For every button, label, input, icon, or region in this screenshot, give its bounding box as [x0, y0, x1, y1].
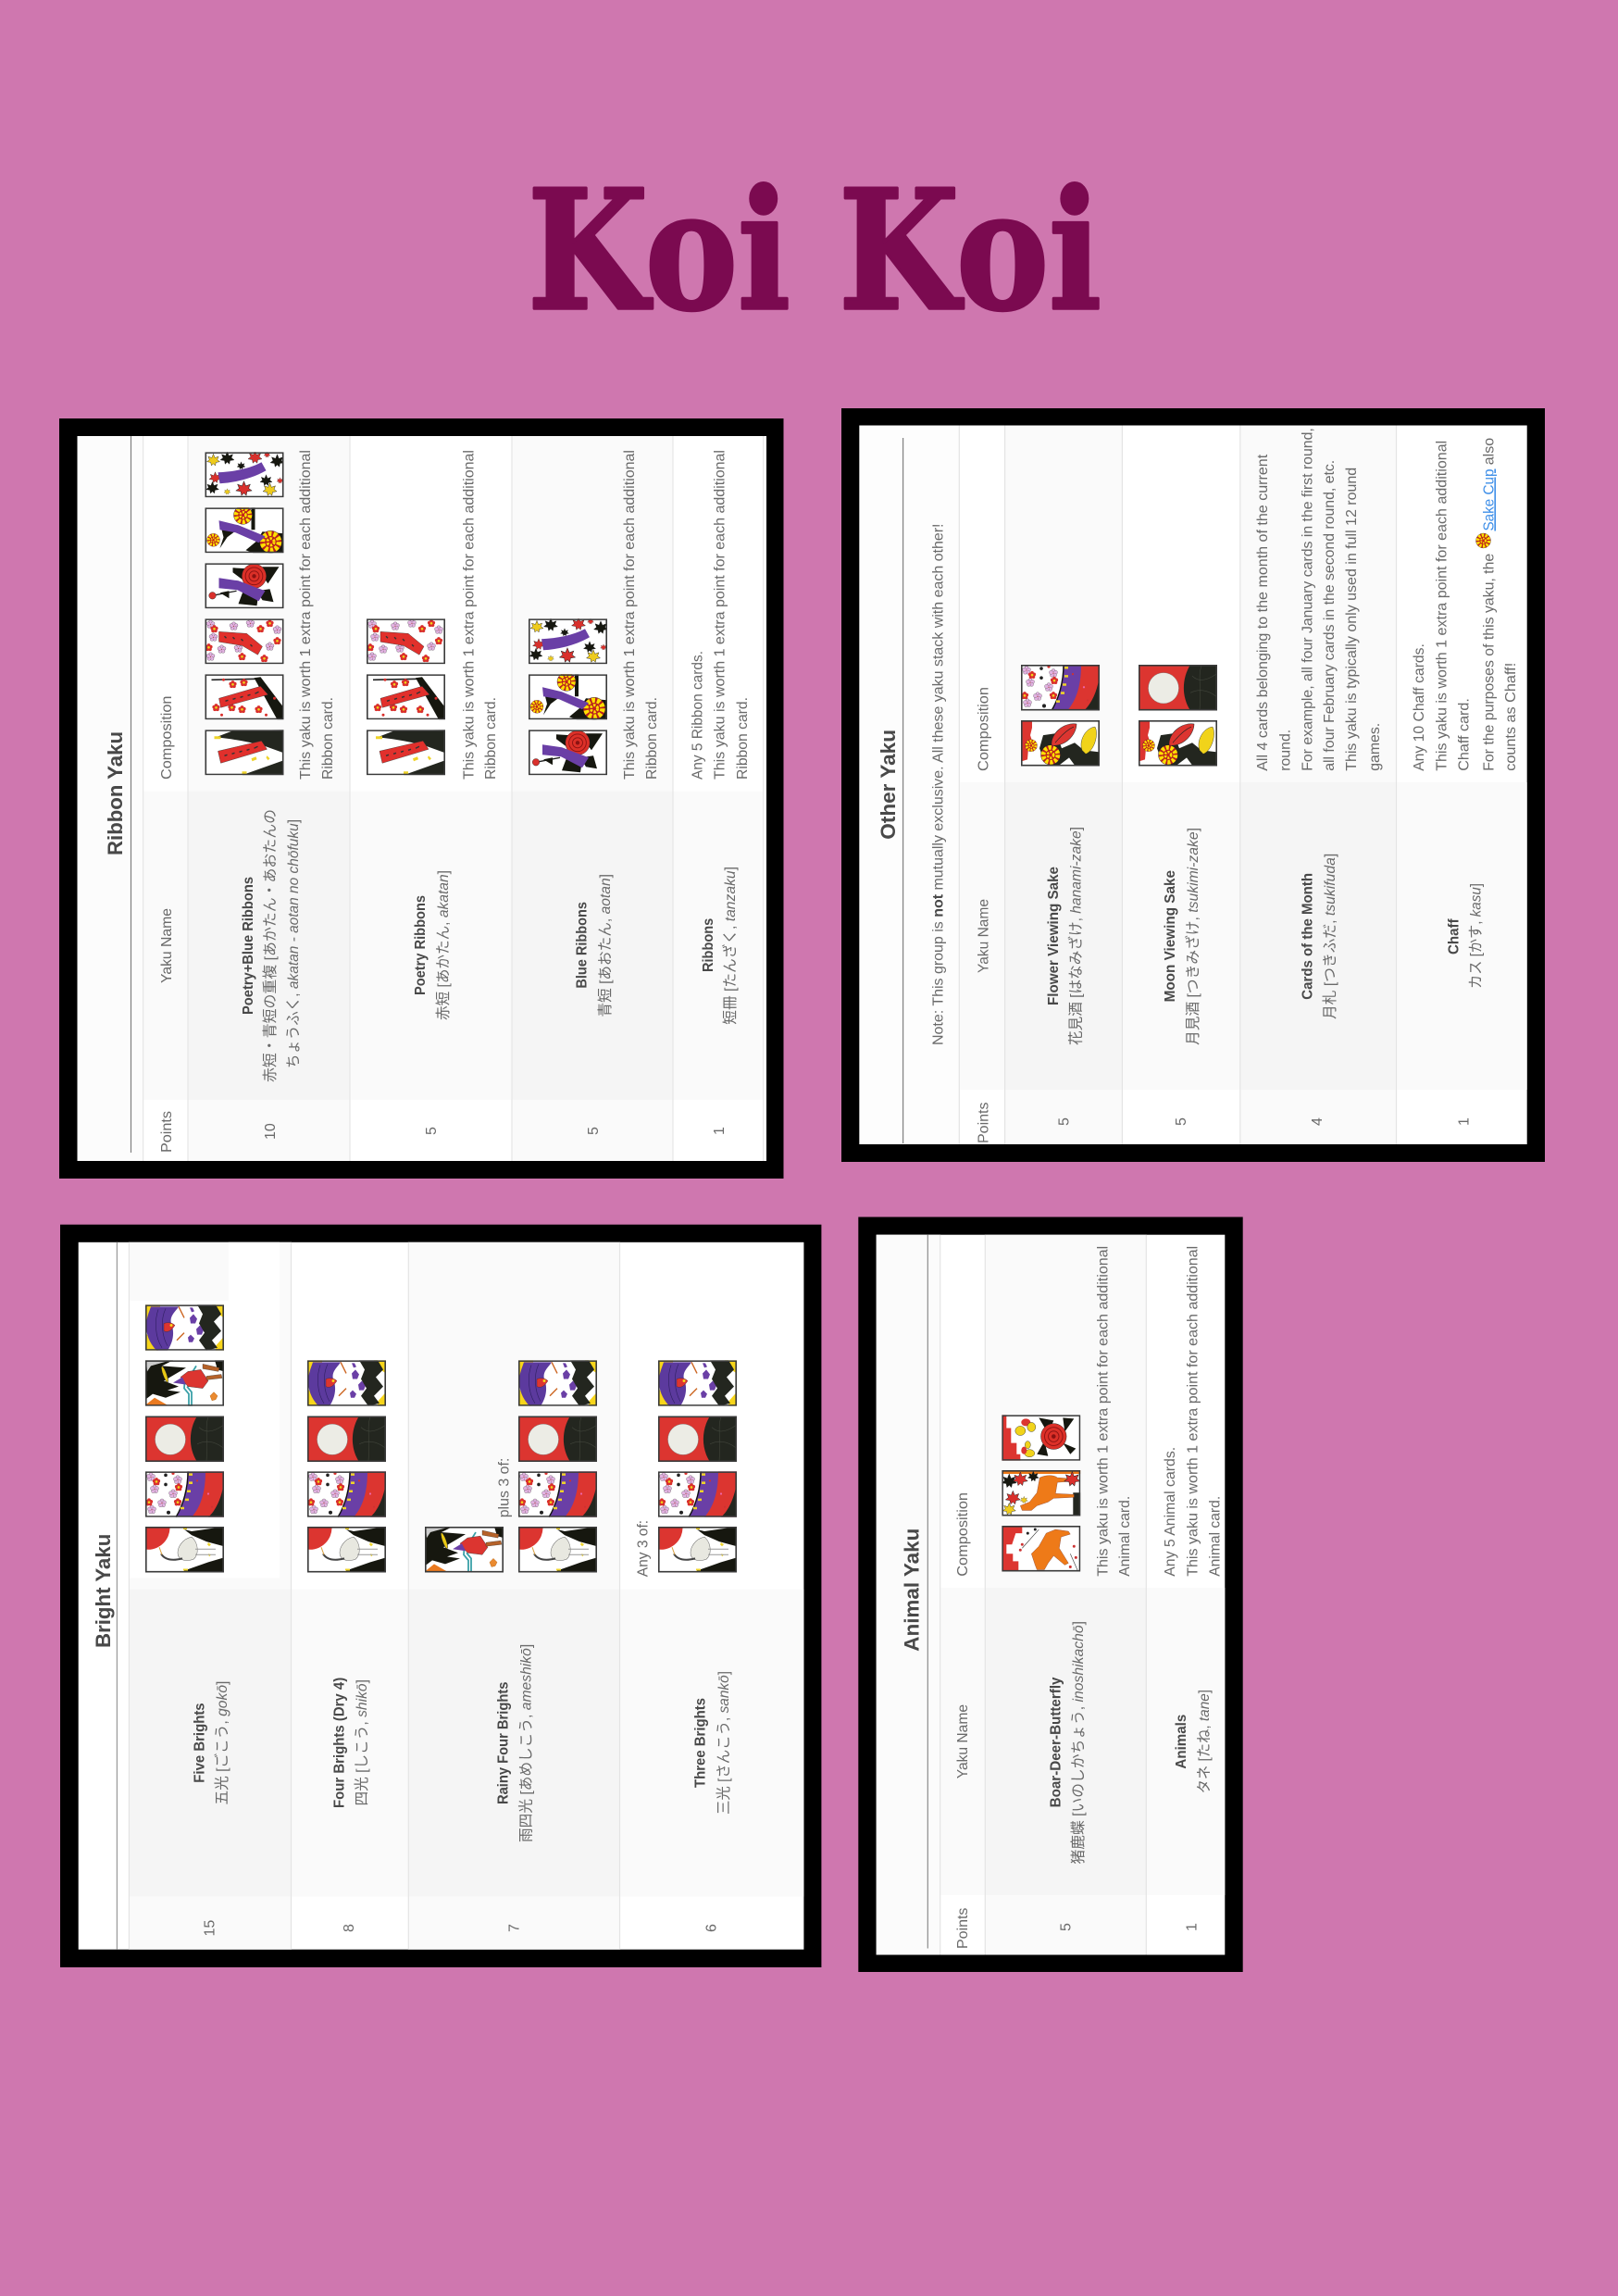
- rain card: [425, 1527, 504, 1572]
- row: Moon Viewing Sake: [1139, 665, 1217, 1126]
- yaku name: 猪鹿蝶 [いのしかちょう, inoshikachō]: [1070, 1621, 1087, 1865]
- icon: sake cup mum: [1475, 533, 1490, 548]
- yaku name: Four Brights (Dry 4): [331, 1678, 347, 1808]
- points: 5: [586, 1127, 602, 1135]
- points: 6: [704, 1924, 720, 1932]
- yaku name: Poetry Ribbons: [413, 895, 429, 995]
- yaku name: Moon Viewing Sake: [1163, 870, 1178, 1002]
- description: This yaku is worth 1 extra point for each additional: [713, 450, 728, 780]
- description: [1163, 1246, 1223, 1577]
- yaku name: [1447, 883, 1485, 989]
- panel: Bright Yaku: [60, 1225, 821, 1967]
- yaku name: [1046, 827, 1085, 1045]
- points: 8: [342, 1924, 357, 1932]
- heading: Ribbon Yaku: [104, 731, 127, 855]
- description: This yaku is worth 1 extra point for each additional: [1096, 1246, 1112, 1577]
- column headers: [159, 696, 175, 1153]
- cards: [367, 618, 445, 775]
- column headers: Yaku Name: [977, 899, 992, 973]
- yaku name: [1300, 854, 1338, 1019]
- points: 5: [1057, 1117, 1073, 1126]
- note: Note: This group is not mutually exclusive. All these yaku stack with each other!: [930, 524, 946, 1045]
- points: 4: [1310, 1117, 1326, 1126]
- cards: [1139, 665, 1217, 767]
- description: Any 5 Animal cards.: [1163, 1447, 1178, 1577]
- row: Blue Ribbons: [529, 450, 660, 1135]
- cards: [529, 618, 607, 775]
- description: Ribbon card.: [320, 697, 336, 780]
- row: Three Brights: [635, 1360, 737, 1932]
- points: 1: [712, 1127, 728, 1135]
- plus note: plus 3 of:: [497, 1458, 513, 1517]
- yaku name: Poetry+Blue Ribbons: [241, 877, 256, 1015]
- any note: Any 3 of:: [635, 1520, 651, 1577]
- row: Boar-Deer-Butterfly: [1002, 1246, 1133, 1931]
- description: [1096, 1246, 1133, 1577]
- points: 1: [1457, 1117, 1473, 1126]
- points: 1: [1185, 1923, 1201, 1931]
- description: This yaku is typically only used in full 12 round: [1344, 468, 1360, 771]
- points: 5: [1174, 1117, 1189, 1126]
- description: [691, 450, 751, 780]
- yaku name: [413, 870, 452, 1020]
- row: Poetry Ribbons: [367, 450, 499, 1135]
- description: Ribbon card.: [483, 697, 499, 780]
- row: Flower Viewing Sake: [1021, 665, 1100, 1126]
- yaku name: [1049, 1621, 1087, 1865]
- yaku name: Flower Viewing Sake: [1046, 867, 1062, 1005]
- column headers: Points: [159, 1111, 175, 1153]
- yaku name: 赤短 [あかたん, akatan]: [435, 870, 452, 1020]
- description: This yaku is worth 1 extra point for each additional: [1435, 441, 1450, 771]
- yaku name: 月見酒 [つきみざけ, tsukimi-zake]: [1184, 828, 1201, 1045]
- description: Any 5 Ribbon cards.: [691, 651, 706, 780]
- row: Ribbons: [691, 450, 751, 1135]
- yaku name: 三光 [さんこう, sankō]: [716, 1671, 732, 1815]
- description: Sake Cup: [1481, 468, 1497, 531]
- description: round.: [1277, 730, 1294, 771]
- column headers: Yaku Name: [159, 908, 175, 983]
- points: 7: [507, 1924, 523, 1932]
- yaku name: 月札 [つきふだ, tsukifuda]: [1322, 854, 1338, 1019]
- description: counts as Chaff!: [1503, 663, 1519, 771]
- panel: Animal Yaku: [858, 1217, 1243, 1972]
- column headers: Points: [977, 1102, 992, 1143]
- description: Animal card.: [1207, 1496, 1223, 1577]
- description: For the purposes of this yaku, the: [1481, 554, 1497, 771]
- cards: [126, 1304, 224, 1572]
- points: 5: [424, 1127, 440, 1135]
- yaku name: Five Brights: [193, 1703, 208, 1783]
- description: Any 10 Chaff cards.: [1412, 643, 1427, 771]
- yaku name: 五光 [ごこう, gokō]: [214, 1681, 230, 1805]
- cards: [289, 1360, 386, 1572]
- description: [461, 450, 499, 780]
- yaku name: 雨四光 [あめしこう, ameshikō]: [518, 1644, 535, 1842]
- cards: [500, 1360, 597, 1572]
- yaku name: Three Brights: [693, 1698, 709, 1788]
- column headers: Composition: [159, 696, 175, 780]
- yaku name: [496, 1644, 535, 1842]
- description: Chaff card.: [1457, 698, 1473, 771]
- yaku name: [1174, 1690, 1213, 1793]
- yaku name: Rainy Four Brights: [496, 1682, 512, 1804]
- panel: Other Yaku: [841, 408, 1545, 1162]
- description: This yaku is worth 1 extra point for each additional: [298, 450, 314, 780]
- cards: [639, 1360, 737, 1572]
- yaku name: [693, 1671, 732, 1815]
- description: All 4 cards belonging to the month of the current: [1255, 454, 1271, 771]
- yaku name: [193, 1681, 230, 1805]
- description: [298, 450, 336, 780]
- yaku name: Chaff: [1447, 918, 1462, 955]
- cards: [1021, 665, 1100, 767]
- title: Koi Koi: [528, 154, 1101, 347]
- heading: Animal Yaku: [901, 1529, 924, 1652]
- yaku name: 赤短・青短の重複 [あかたん・あおたんの: [262, 809, 279, 1082]
- yaku name: Animals: [1174, 1715, 1189, 1769]
- yaku name: Cards of the Month: [1300, 873, 1315, 1000]
- yaku name: カス [かす, kasu]: [1468, 883, 1485, 989]
- description: games.: [1367, 723, 1383, 771]
- yaku name: [241, 809, 302, 1082]
- yaku name: Blue Ribbons: [575, 902, 591, 989]
- cards: [1002, 1415, 1080, 1572]
- column headers: [955, 1492, 971, 1949]
- row: Five Brights: [126, 1304, 230, 1937]
- heading: Other Yaku: [877, 730, 900, 840]
- column headers: Yaku Name: [955, 1704, 971, 1778]
- points: 10: [263, 1123, 279, 1140]
- yaku name: Boar-Deer-Butterfly: [1049, 1677, 1064, 1807]
- row: Four Brights: [289, 1360, 386, 1932]
- cards: [205, 451, 284, 775]
- yaku name: 青短 [あおたん, aotan]: [597, 874, 614, 1017]
- description: [1412, 438, 1519, 771]
- description: [1255, 428, 1383, 771]
- description: all four February cards in the second round, etc.: [1322, 460, 1338, 771]
- points: 5: [1059, 1923, 1075, 1931]
- row: Rainy Four Brights: [425, 1360, 597, 1932]
- yaku name: [575, 874, 614, 1017]
- points: 15: [203, 1920, 218, 1937]
- description: This yaku is worth 1 extra point for each additional: [622, 450, 638, 780]
- yaku name: [701, 867, 739, 1025]
- description: For example, all four January cards in the first round,: [1300, 428, 1315, 771]
- description: also: [1481, 438, 1497, 465]
- row: Animals: [1163, 1246, 1223, 1931]
- column headers: Composition: [955, 1492, 971, 1577]
- yaku name: 花見酒 [はなみざけ, hanami-zake]: [1067, 827, 1085, 1045]
- yaku name: ちょうふく, akatan - aotan no chōfuku]: [286, 819, 302, 1068]
- row: Cards of the Month: [1255, 428, 1383, 1126]
- description: This yaku is worth 1 extra point for each additional: [461, 450, 478, 780]
- column headers: Composition: [977, 687, 992, 771]
- column headers: [977, 687, 992, 1143]
- panel: Ribbon Yaku: [59, 418, 783, 1179]
- yaku name: 四光 [しこう, shikō]: [354, 1679, 370, 1805]
- yaku name: [331, 1678, 370, 1808]
- description: This yaku is worth 1 extra point for each additional: [1185, 1246, 1201, 1577]
- yaku name: Ribbons: [701, 918, 716, 972]
- yaku name: 短冊 [たんざく, tanzaku]: [721, 867, 739, 1025]
- description: [622, 450, 660, 780]
- column headers: Points: [955, 1908, 971, 1949]
- description: Animal card.: [1117, 1496, 1133, 1577]
- row: Chaff: [1412, 438, 1519, 1126]
- description: Ribbon card.: [644, 697, 660, 780]
- heading: Bright Yaku: [92, 1534, 115, 1648]
- row: Poetry+Blue Ribbons: [205, 450, 336, 1140]
- description: Ribbon card.: [735, 697, 751, 780]
- yaku name: タネ [たね, tane]: [1196, 1690, 1213, 1793]
- yaku name: [1163, 828, 1201, 1045]
